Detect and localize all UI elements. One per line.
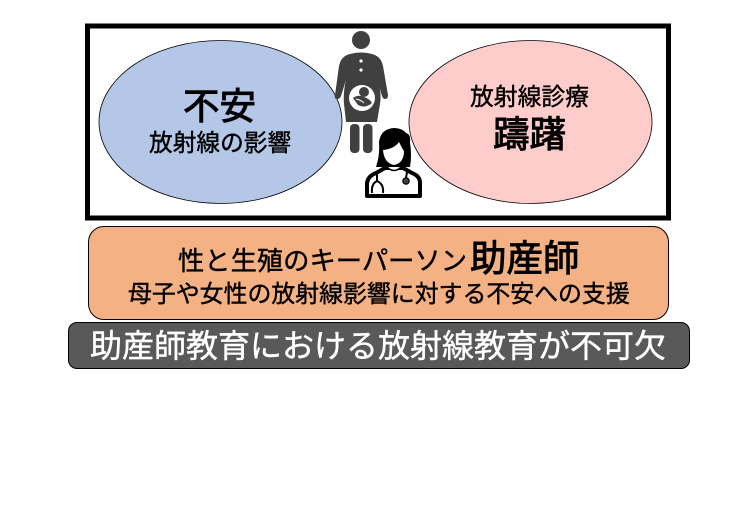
panel: conclusion banner (68, 322, 690, 369)
icon: female doctor (367, 128, 420, 196)
text: radiation education is essential: 助産師教育における放射線教育が不可欠 (90, 328, 666, 364)
frame border (88, 26, 668, 218)
anxiety ellipse (99, 40, 342, 204)
text: hesitation heading: 躊躇 (493, 114, 566, 155)
panel: midwife role (88, 226, 669, 320)
heading: midwife: 助産師 (470, 238, 580, 279)
heading: key person: 性と生殖のキーパーソン (178, 246, 467, 276)
text: radiological care: 放射線診療 (470, 84, 589, 111)
text: radiation effects: 放射線の影響 (149, 131, 291, 157)
text: support for anxiety: 母子や女性の放射線影響に対する不安への支援 (128, 281, 630, 308)
icon: pregnant woman (335, 31, 388, 153)
text: anxiety heading: 不安 (183, 86, 256, 127)
panel: anxiety and hesitation frame (85, 24, 671, 220)
hesitation ellipse (409, 40, 652, 204)
